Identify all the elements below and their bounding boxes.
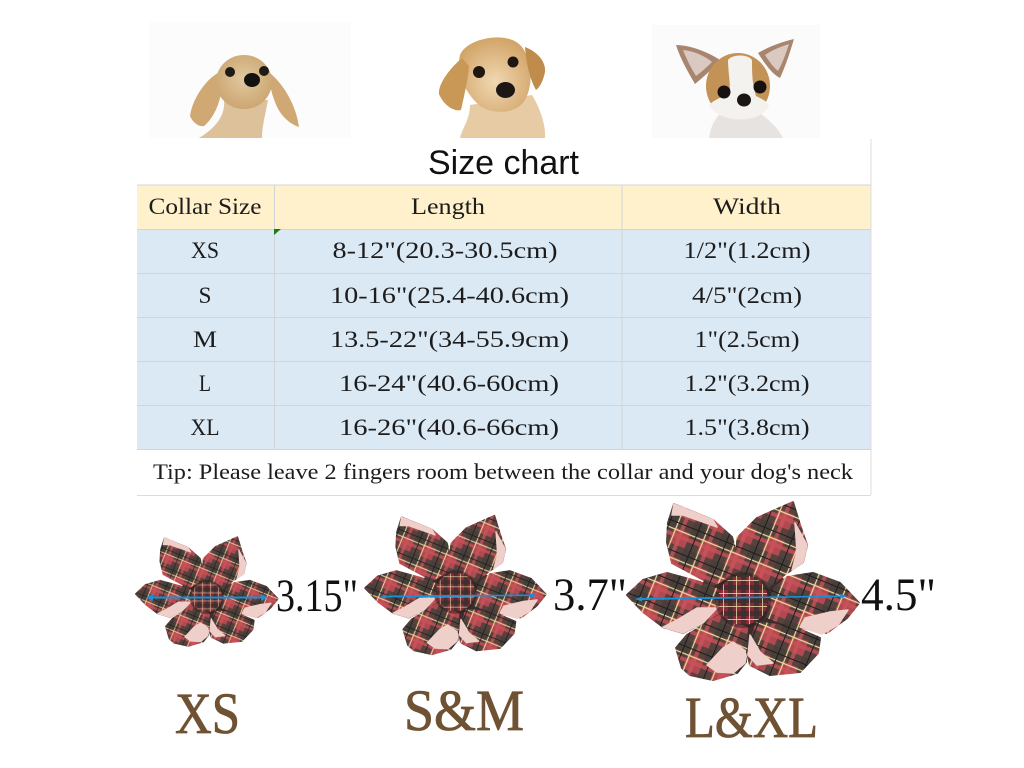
icon: plaid flower XS: [136, 537, 278, 646]
icon: chihuahua puppy: [652, 25, 820, 138]
panel: flower L&XL: [627, 502, 936, 750]
icon: golden retriever puppy: [439, 37, 545, 138]
icon: plaid flower L&XL: [627, 502, 859, 680]
table body rows: L: [199, 371, 211, 396]
size label: XS: XS: [175, 681, 240, 746]
table body rows: 16-24"(40.6-60cm): [339, 371, 559, 396]
table body rows: S: [198, 283, 212, 308]
table body rows: 8-12"(20.3-30.5cm): [332, 238, 558, 263]
table body rows: M: [193, 327, 217, 352]
tip text: Tip: Please leave 2 fingers room between the collar and your dog's neck: [153, 459, 853, 484]
table body rows: 1/2"(1.2cm): [684, 238, 810, 263]
table body rows: XS: [191, 238, 219, 263]
table header row: Length: [411, 194, 486, 219]
icon: plaid flower S&M: [365, 516, 546, 654]
panel: flower S&M: [365, 516, 627, 743]
measure: 4.5 inches: 4.5": [861, 569, 936, 621]
icon: spaniel puppy: [149, 22, 351, 138]
table body rows: 4/5"(2cm): [692, 283, 802, 308]
arrow: XS width: [146, 594, 268, 601]
table header row: Collar Size: [148, 194, 262, 219]
arrow: L&XL width: [635, 594, 847, 602]
table header row: Width: [713, 194, 782, 219]
panel: size chart table: [137, 185, 871, 484]
size label: L&XL: L&XL: [685, 685, 818, 750]
table body rows: 1.2"(3.2cm): [684, 371, 810, 396]
title: Size chart: [428, 144, 580, 182]
arrow: S&M width: [380, 593, 537, 598]
panel: dog photos: [149, 22, 820, 138]
panel: flower XS: [136, 537, 358, 746]
table header row: [137, 185, 871, 229]
measure: 3.15 inches: 3.15": [276, 570, 358, 622]
table body rows: 1.5"(3.8cm): [684, 415, 810, 440]
table body rows: 16-26"(40.6-66cm): [339, 415, 559, 440]
table body rows: 13.5-22"(34-55.9cm): [330, 327, 569, 352]
measure: 3.7 inches: 3.7": [553, 569, 627, 621]
table body rows: [137, 185, 871, 450]
table body rows: XL: [190, 415, 220, 440]
table body rows: 10-16"(25.4-40.6cm): [330, 283, 569, 308]
table body rows: 1"(2.5cm): [694, 327, 800, 352]
size label: S&M: S&M: [404, 678, 524, 743]
